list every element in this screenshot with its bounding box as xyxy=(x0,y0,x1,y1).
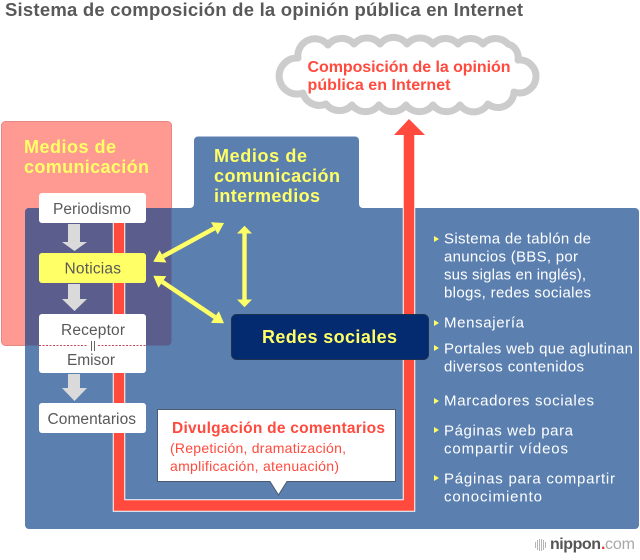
box: redes sociales: Redes sociales xyxy=(262,327,397,347)
list item: páginas de vídeos: Páginas web para xyxy=(444,422,574,440)
box: receptor / emisor: Receptor xyxy=(61,322,125,339)
arrow: periodismo to noticias xyxy=(62,224,87,251)
box: periodismo: Periodismo xyxy=(53,201,131,218)
list item: BBS, blogs, redes sociales: anuncios (BBS, por xyxy=(444,248,578,266)
box: noticias xyxy=(39,253,146,283)
logo: nippon.com: . xyxy=(601,536,605,553)
arrow: medios intermedios to redes sociales xyxy=(237,226,252,307)
list item: BBS, blogs, redes sociales xyxy=(434,230,591,302)
panel: medios de comunicación intermedios xyxy=(25,136,639,529)
list item: marcadores sociales: Marcadores sociales xyxy=(444,392,594,410)
list item: portales web: Portales web que aglutinan xyxy=(444,340,633,358)
list item: páginas de conocimiento xyxy=(434,470,615,506)
logo: nippon.com: nippon xyxy=(550,536,601,553)
panel: medios de comunicación: comunicación xyxy=(24,157,149,177)
list item: páginas de conocimiento: Páginas para compartir xyxy=(444,470,615,488)
panel: medios de comunicación xyxy=(2,122,172,346)
arrow: noticias to receptor xyxy=(62,284,87,311)
arrow: emisor to comentarios xyxy=(62,374,87,401)
arrow: red flow line to cloud xyxy=(119,119,425,506)
panel: medios de comunicación: Medios de xyxy=(24,137,116,157)
callout: divulgación de comentarios: Divulgación de comentarios xyxy=(172,420,385,437)
panel: medios de comunicación intermedios: comunicación xyxy=(214,166,340,186)
list item: páginas de conocimiento: conocimiento xyxy=(444,488,542,506)
callout: divulgación de comentarios: amplificación, atenuación) xyxy=(170,458,339,474)
box: periodismo xyxy=(39,193,146,223)
list item: páginas de vídeos: compartir vídeos xyxy=(444,440,568,458)
box: comentarios xyxy=(39,403,146,433)
cloud: composición de la opinión pública en Internet xyxy=(279,37,536,112)
overlap of the two panels xyxy=(25,208,172,346)
list item: BBS, blogs, redes sociales: sus siglas en inglés), xyxy=(444,266,586,284)
box: redes sociales xyxy=(232,314,428,360)
box: receptor / emisor: Emisor xyxy=(67,352,115,369)
box: receptor / emisor xyxy=(39,314,146,373)
box: comentarios: Comentarios xyxy=(48,411,136,428)
logo: nippon.com xyxy=(536,536,635,553)
list item: mensajería: Mensajería xyxy=(444,314,525,332)
callout: divulgación de comentarios xyxy=(158,410,396,495)
box: noticias: Noticias xyxy=(64,260,121,278)
logo: nippon.com: com xyxy=(605,536,635,553)
cloud: composición de la opinión pública en Internet: Composición de la opinión xyxy=(308,59,510,76)
cloud: composición de la opinión pública en Internet: pública en Internet xyxy=(308,77,451,94)
list item: portales web: diversos contenidos xyxy=(444,358,584,376)
arrow: noticias to redes sociales xyxy=(153,276,224,323)
callout: divulgación de comentarios: (Repetición, dramatización, xyxy=(170,440,346,456)
list item: páginas de vídeos xyxy=(434,422,574,458)
panel: medios de comunicación intermedios: Medios de xyxy=(214,146,307,166)
panel: medios de comunicación intermedios: intermedios xyxy=(214,186,320,206)
list item: portales web xyxy=(434,340,633,376)
list item: BBS, blogs, redes sociales: blogs, redes sociales xyxy=(444,284,591,302)
list item: BBS, blogs, redes sociales: Sistema de tablón de xyxy=(444,230,591,248)
list: tipos de medios intermedios xyxy=(434,230,633,506)
arrow: noticias to medios intermedios xyxy=(153,222,224,262)
